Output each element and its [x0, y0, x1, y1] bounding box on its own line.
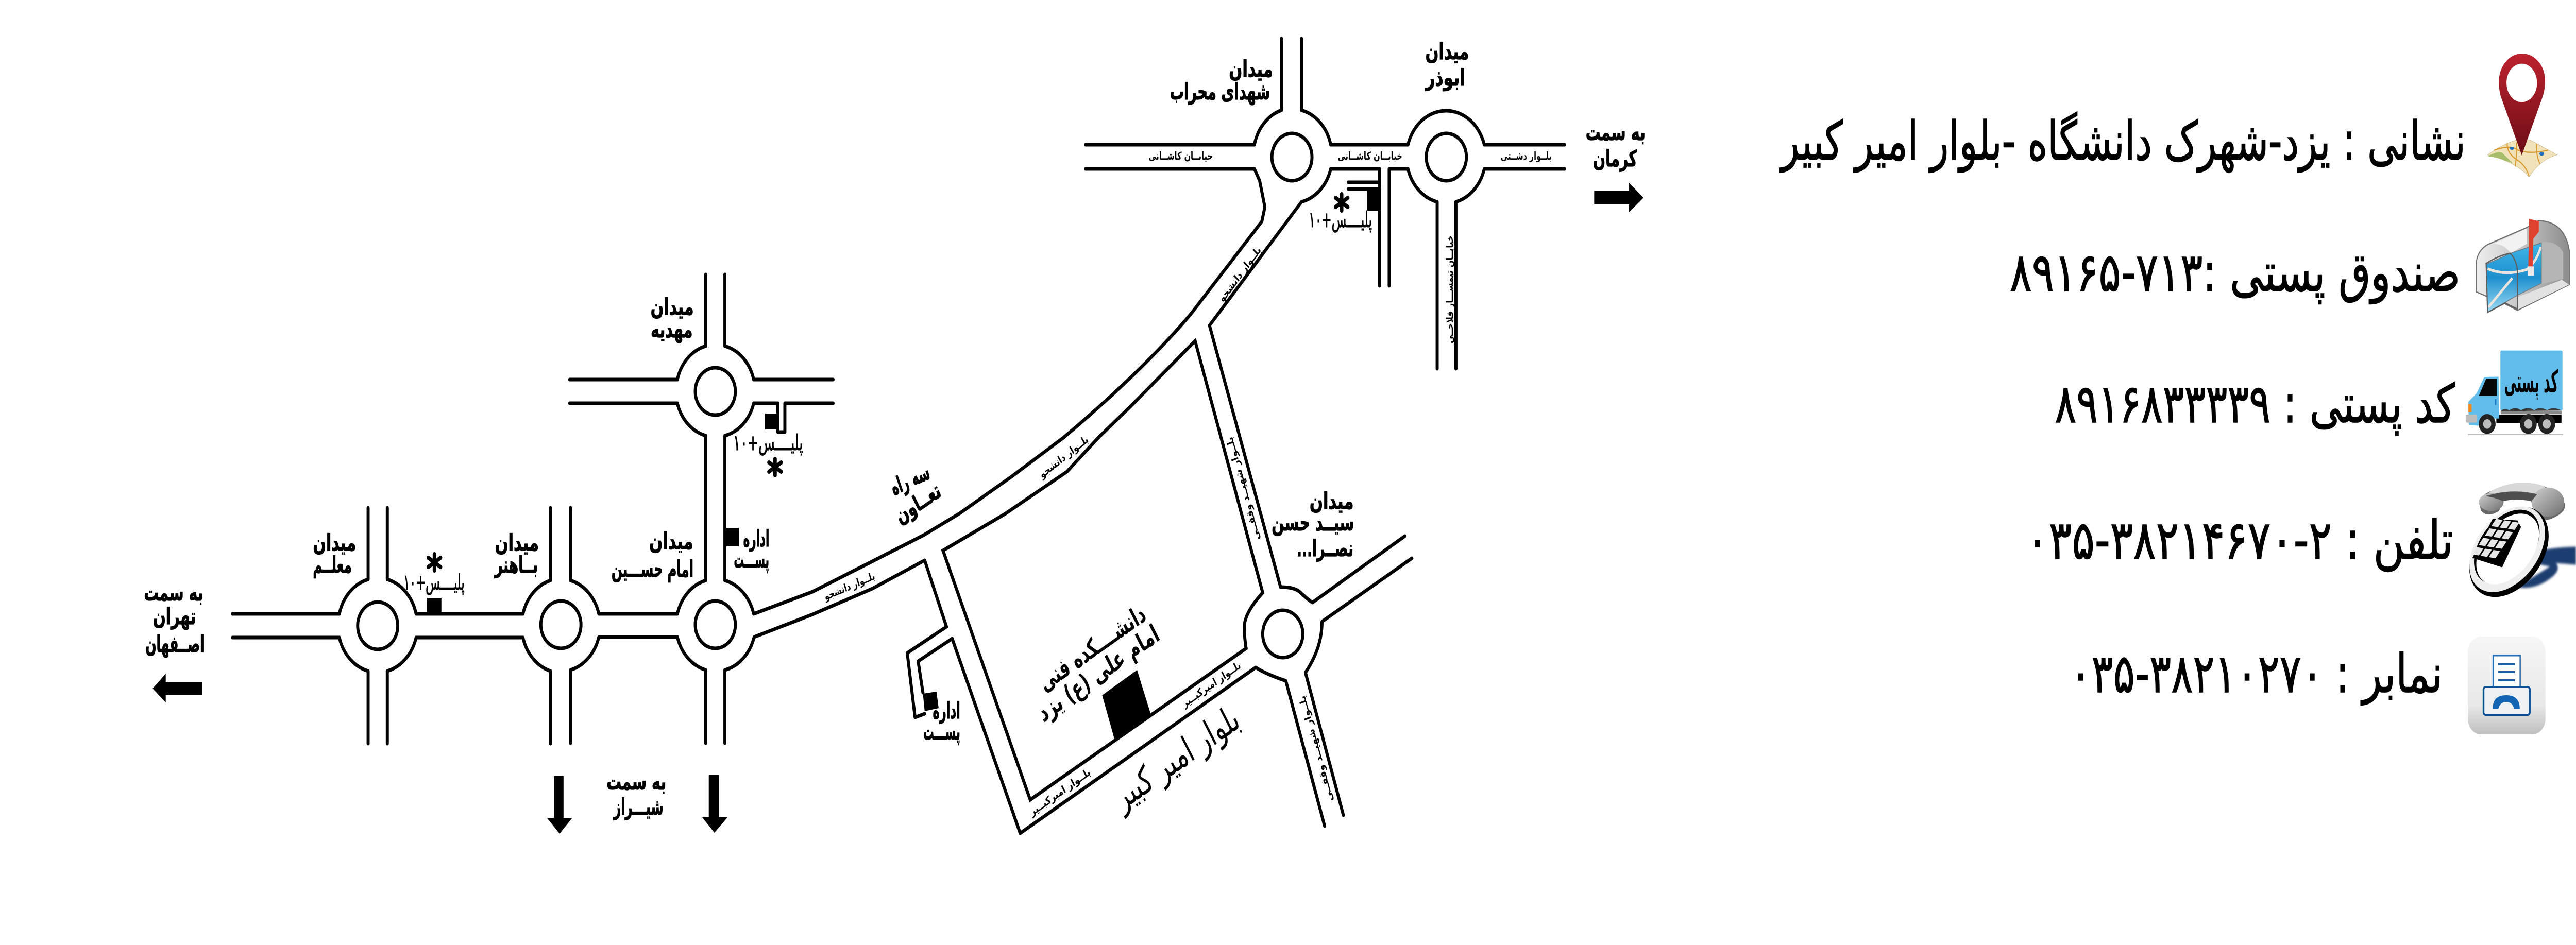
icon: mailbox: [2476, 219, 2569, 313]
street name: Kashani street east: خیابــان کاشــانی: [1338, 150, 1402, 162]
street name: Kashani street west: خیابــان کاشــانی: [1149, 150, 1213, 162]
street name: Amir Kabir small 1: بلــوار امیرکبــیر: [1027, 766, 1092, 819]
label: Moalem square: میدان: [313, 529, 356, 556]
college building: [1102, 670, 1150, 739]
label: college name: دانشــــکده فنی: [1034, 598, 1150, 697]
icon: map pin: [2487, 54, 2557, 177]
label: Moalem square: [313, 529, 356, 578]
contact: PO box text: ۸۹۱۶۵-۷۱۳: صندوق پستی: [2010, 242, 2460, 304]
marker: star near Bahonar police: [428, 554, 440, 571]
label: to Tehran Isfahan: تهران: [153, 603, 196, 630]
label: to Shiraz: به سمت: [606, 768, 666, 795]
label: to Tehran Isfahan: [144, 579, 205, 658]
label: Aboozar square: میدان: [1426, 38, 1469, 65]
arrow: right to Kerman: [1594, 183, 1643, 212]
street name: road north of square: بلــوار شهیــد وقفــی: [1224, 435, 1262, 542]
label: Imam Hossein square: [612, 528, 693, 583]
street name: Dashti boulevard: بلــوار دشــتی: [1501, 150, 1552, 162]
label: Mahdieh square: مهدیه: [651, 316, 692, 343]
icon: postal truck: [2466, 351, 2563, 435]
label: to Kerman: کرمان: [1593, 145, 1637, 172]
label: post office campus: پســـت: [923, 718, 960, 745]
label: Shohada-ye Mehrab square: [1170, 56, 1273, 105]
label: post office campus: [923, 697, 960, 745]
label: Taavon junction: سه راه: [887, 458, 933, 501]
label: to Shiraz: شیـــراز: [613, 794, 664, 820]
marker: star near Aboozar police: [1335, 194, 1348, 211]
roundabout islands: [358, 133, 1466, 658]
landmark building blocks: [427, 191, 1380, 711]
label: Taavon junction: تعــاون: [891, 477, 945, 529]
contact: fax text: ۰۳۵-۳۸۲۱۰۲۷۰ : نمابر: [2070, 643, 2443, 706]
label: Imam Hossein square: میدان: [649, 528, 693, 555]
label: college name: امام علی (ع) یزد: [1033, 618, 1164, 728]
label: Seyed Hasan Nasrallah square: سیــد حسن: [1272, 509, 1354, 536]
label: Imam Hossein square: امام حســـین: [612, 556, 693, 583]
icon: telephone: [2454, 483, 2576, 615]
label: to Shiraz: [606, 768, 666, 820]
street name: Teymsar Fallahi: خیابــان تیمســـار فلاحــی: [1445, 235, 1455, 343]
label: post office Imam Hossein: اداره: [743, 525, 769, 552]
label: Mahdieh square: [651, 294, 694, 343]
icon: fax: [2468, 637, 2546, 734]
label: Aboozar square: ابوذر: [1425, 64, 1465, 91]
label: Aboozar square: [1425, 38, 1469, 91]
label: Bahonar square: بــاهنر: [494, 552, 538, 578]
label: police 10+ Mahdieh: پلیــــس+۱۰: [733, 431, 803, 456]
street name: Daneshjoo boulevard 2: بلــوار دانشجو: [1037, 433, 1090, 481]
label: post office Imam Hossein: [734, 525, 769, 573]
label: Bahonar square: [494, 529, 539, 578]
street name: Amir Kabir small 2: بلــوار امیرکبــیر: [1180, 659, 1243, 710]
label: Seyed Hasan Nasrallah square: میدان: [1310, 488, 1353, 514]
label: Mahdieh square: میدان: [651, 294, 694, 320]
street name: road south of square: بلــوار شهیــد وقفــی: [1297, 694, 1335, 803]
label: to Kerman: به سمت: [1586, 119, 1646, 146]
arrow: left to Tehran: [152, 674, 202, 702]
street name: Daneshjoo boulevard 3: بلــوار دانشجو: [1216, 244, 1263, 305]
label: Taavon junction: [887, 458, 945, 529]
label: Moalem square: معلــم: [313, 552, 352, 578]
marker: star near Mahdieh police: [769, 459, 781, 475]
label: to Kerman: [1586, 119, 1646, 172]
label: Seyed Hasan Nasrallah square: ...نصــرا: [1297, 535, 1353, 562]
label: Shohada-ye Mehrab square: میدان: [1229, 56, 1273, 82]
contact: address text: نشانی : یزد-شهرک دانشگاه -بلوار امیر کبیر: [1780, 110, 2466, 173]
label: Bahonar square: میدان: [495, 529, 539, 556]
label: to Tehran Isfahan: به سمت: [144, 579, 204, 606]
label: to Tehran Isfahan: اصــفهان: [145, 631, 205, 658]
label: post office Imam Hossein: پســـت: [734, 546, 769, 573]
contact: postal code text: ۸۹۱۶۸۳۳۳۳۹ : کد پستی: [2055, 373, 2455, 436]
road network map: [232, 39, 1565, 833]
contact: phone text: ۰۳۵-۳۸۲۱۴۶۷۰-۲ : تلفن: [2026, 509, 2453, 572]
arrow: down 1 to Shiraz: [547, 776, 572, 834]
street name: Daneshjoo boulevard 1: بلــوار دانشجو: [822, 570, 876, 603]
roads: all street outlines: [232, 39, 1565, 833]
label: Amir Kabir boulevard large: بلوار امیر کبیر: [1106, 696, 1246, 819]
label: police 10+ Aboozar: پلیــــس+۱۰: [1309, 208, 1372, 233]
label: Seyed Hasan Nasrallah square: [1272, 488, 1354, 562]
arrow: down 2 to Shiraz: [702, 775, 727, 833]
label: post office campus: اداره: [933, 697, 960, 724]
label: Shohada-ye Mehrab square: شهدای محراب: [1170, 78, 1270, 105]
label: police 10+ Bahonar: پلیــــس+۱۰: [403, 570, 465, 595]
